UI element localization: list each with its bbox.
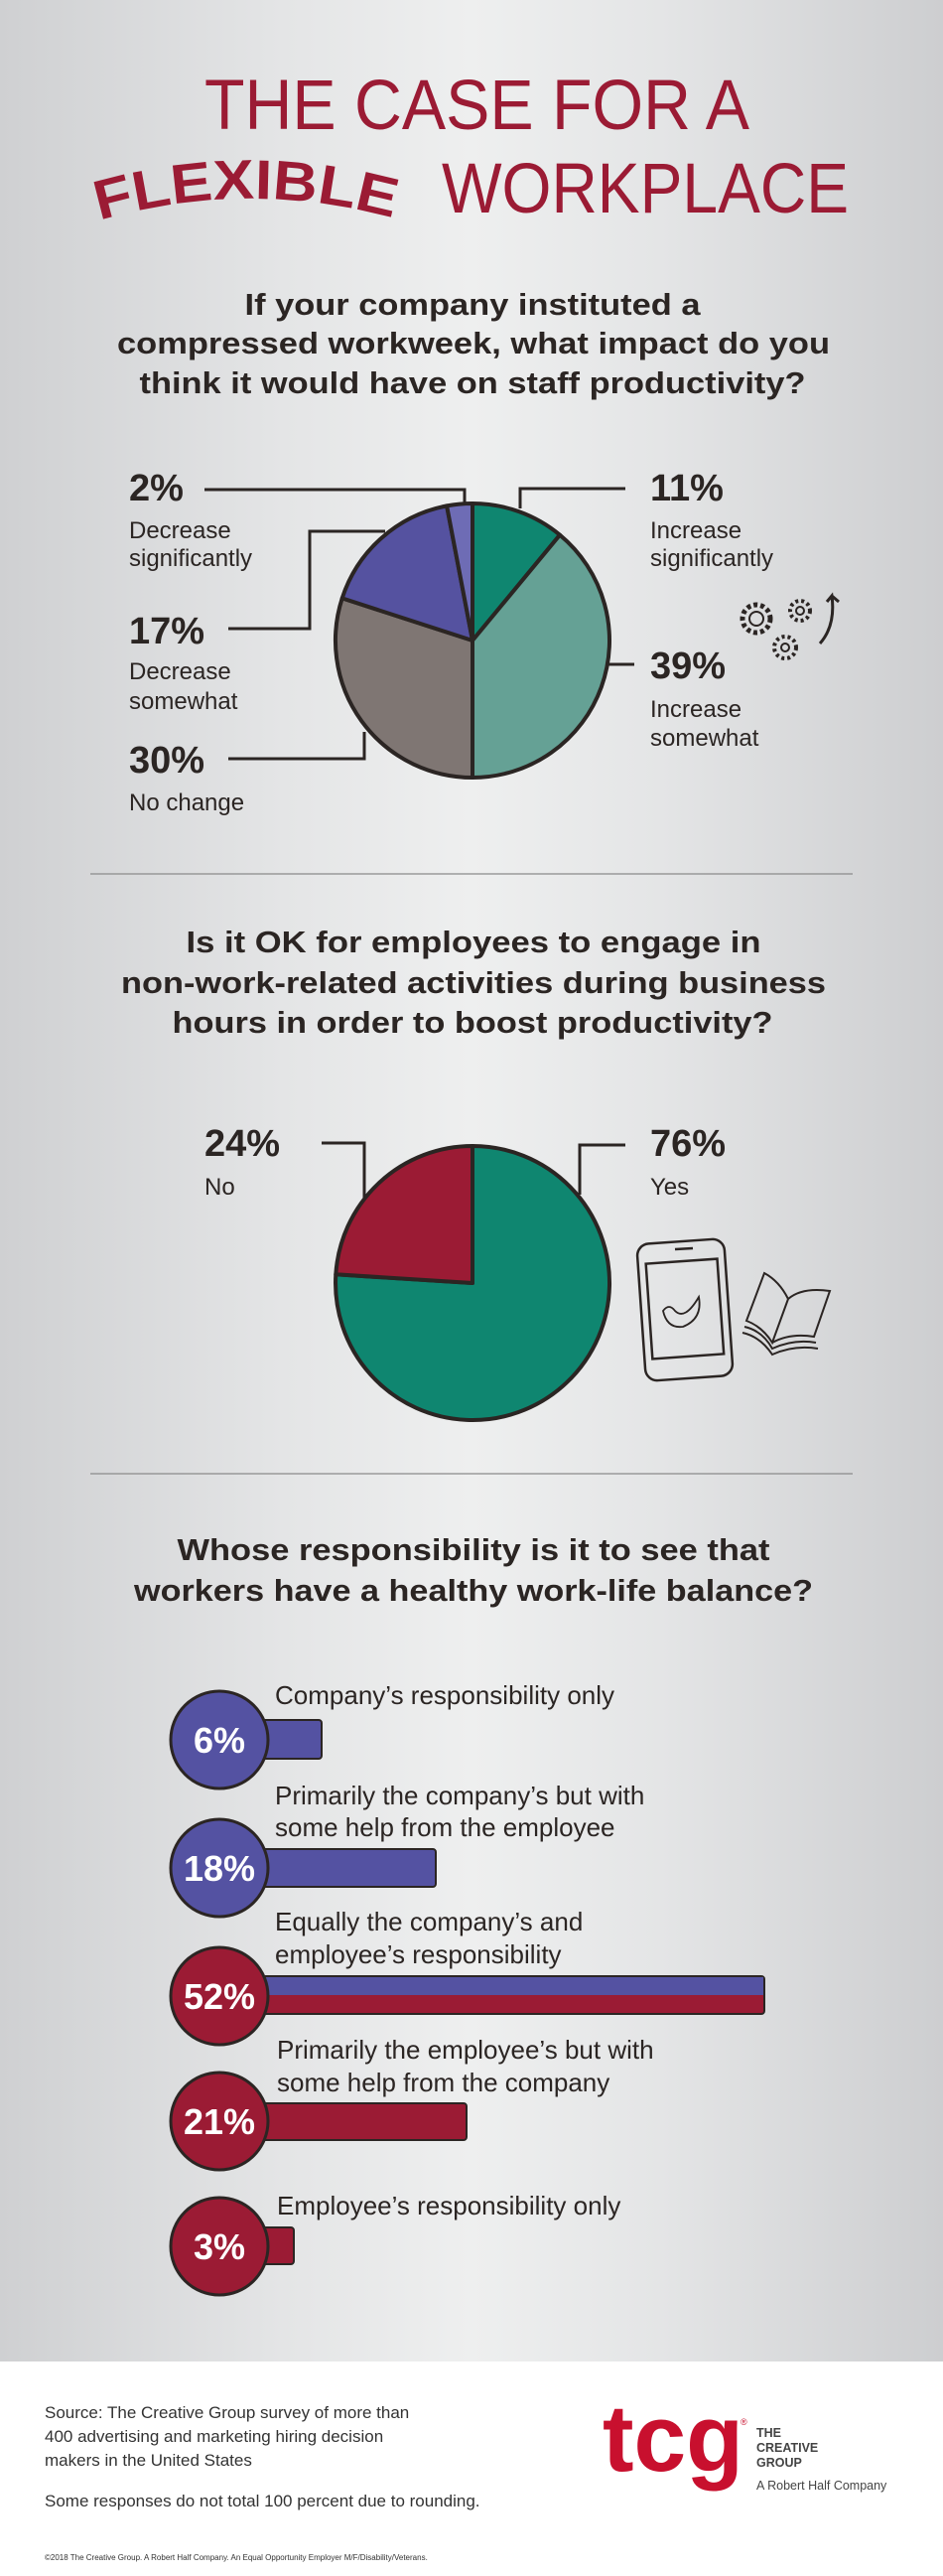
question 3 heading xyxy=(133,1532,813,1608)
logo: tcg: THE xyxy=(756,2426,781,2440)
question 3 heading: Whose responsibility is it to see that xyxy=(177,1532,770,1567)
title: THE CASE FOR A xyxy=(204,67,750,145)
pie 2 labels xyxy=(204,1123,726,1201)
logo: tcg: CREATIVE xyxy=(756,2441,818,2455)
bar: 3% employee only: 3% xyxy=(194,2226,245,2267)
pie 1 labels: somewhat xyxy=(650,725,759,752)
bar: 3% employee only xyxy=(171,2191,620,2295)
divider xyxy=(90,873,853,875)
icon: book xyxy=(742,1273,830,1355)
pie 1 labels: Increase xyxy=(650,517,741,544)
source text: Some responses do not total 100 percent due to rounding. xyxy=(45,2492,480,2510)
logo: tcg xyxy=(603,2385,887,2493)
title: FLEXIBLE xyxy=(93,160,399,219)
title: WORKPLACE xyxy=(442,150,849,228)
pie 1 labels: 17% xyxy=(129,611,204,652)
pie chart 1 xyxy=(336,503,609,778)
bar: 52% equally xyxy=(171,1907,764,2045)
pie 1 labels: Increase xyxy=(650,696,741,723)
question 2 heading xyxy=(121,925,826,1040)
logo: tcg: tcg xyxy=(603,2385,743,2492)
pie 1 labels xyxy=(129,468,773,816)
source text: 400 advertising and marketing hiring decision xyxy=(45,2427,383,2446)
bar: 6% company only xyxy=(171,1680,614,1789)
source text: Source: The Creative Group survey of more than xyxy=(45,2403,409,2422)
pie 2 labels: 24% xyxy=(204,1123,280,1165)
pie 1 labels: 11% xyxy=(650,468,724,509)
bar: 52% equally: Equally the company’s and xyxy=(275,1907,583,1936)
pie 1 labels: 39% xyxy=(650,645,726,687)
pie 1 labels: No change xyxy=(129,789,244,816)
pie chart 2 xyxy=(336,1146,609,1420)
source text xyxy=(45,2403,480,2562)
logo: tcg: A Robert Half Company xyxy=(756,2479,887,2493)
pie 1 labels: 30% xyxy=(129,740,204,782)
bar: 18% primarily company: Primarily the company’s but with xyxy=(275,1781,644,1810)
question 3 heading: workers have a healthy work-life balance? xyxy=(133,1573,813,1608)
question 1 heading: If your company instituted a xyxy=(244,287,701,322)
question 1 heading: compressed workweek, what impact do you xyxy=(117,326,830,360)
footer panel xyxy=(0,2361,943,2576)
bar: 18% primarily company xyxy=(171,1781,644,1917)
leader lines pie 1 xyxy=(204,489,634,759)
icon: gears xyxy=(742,596,839,658)
question 1 heading: think it would have on staff productivity? xyxy=(139,365,806,400)
bar: 3% employee only: Employee’s responsibility only xyxy=(277,2191,620,2220)
leader lines pie 2 xyxy=(322,1143,625,1198)
logo: tcg: GROUP xyxy=(756,2456,802,2470)
bar: 21% primarily employee: Primarily the employee’s but with xyxy=(277,2035,654,2065)
source text: ©2018 The Creative Group. A Robert Half Company. An Equal Opportunity Employer M/F/Disability/Veterans. xyxy=(45,2553,428,2562)
bar chart: responsibility xyxy=(171,1680,764,2295)
bar: 21% primarily employee: 21% xyxy=(184,2101,255,2142)
pie 2 labels: Yes xyxy=(650,1174,689,1201)
icon: phone xyxy=(636,1238,734,1381)
pie 1 labels: significantly xyxy=(650,545,773,572)
bar: 52% equally: 52% xyxy=(184,1976,255,2017)
divider xyxy=(90,1473,853,1475)
pie 1 labels: somewhat xyxy=(129,688,238,715)
pie 2 labels: No xyxy=(204,1174,235,1201)
bar: 18% primarily company: 18% xyxy=(184,1848,255,1889)
source text: makers in the United States xyxy=(45,2451,252,2470)
bar: 6% company only: 6% xyxy=(194,1720,245,1761)
bar: 18% primarily company: some help from the employee xyxy=(275,1812,615,1842)
question 2 heading: non-work-related activities during business xyxy=(121,965,826,1000)
pie 1 labels: Decrease xyxy=(129,517,231,544)
logo: tcg: ® xyxy=(741,2417,747,2427)
pie 1 labels: significantly xyxy=(129,545,252,572)
pie 1 labels: Decrease xyxy=(129,658,231,685)
question 1 heading xyxy=(117,287,830,400)
title xyxy=(93,67,849,228)
question 2 heading: hours in order to boost productivity? xyxy=(173,1005,772,1040)
bar: 21% primarily employee xyxy=(171,2035,654,2170)
pie 1 labels: 2% xyxy=(129,468,184,509)
bar: 21% primarily employee: some help from the company xyxy=(277,2068,609,2097)
bar: 52% equally: employee’s responsibility xyxy=(275,1939,562,1969)
bar: 6% company only: Company’s responsibility only xyxy=(275,1680,614,1710)
question 2 heading: Is it OK for employees to engage in xyxy=(187,925,760,959)
pie 2 labels: 76% xyxy=(650,1123,726,1165)
